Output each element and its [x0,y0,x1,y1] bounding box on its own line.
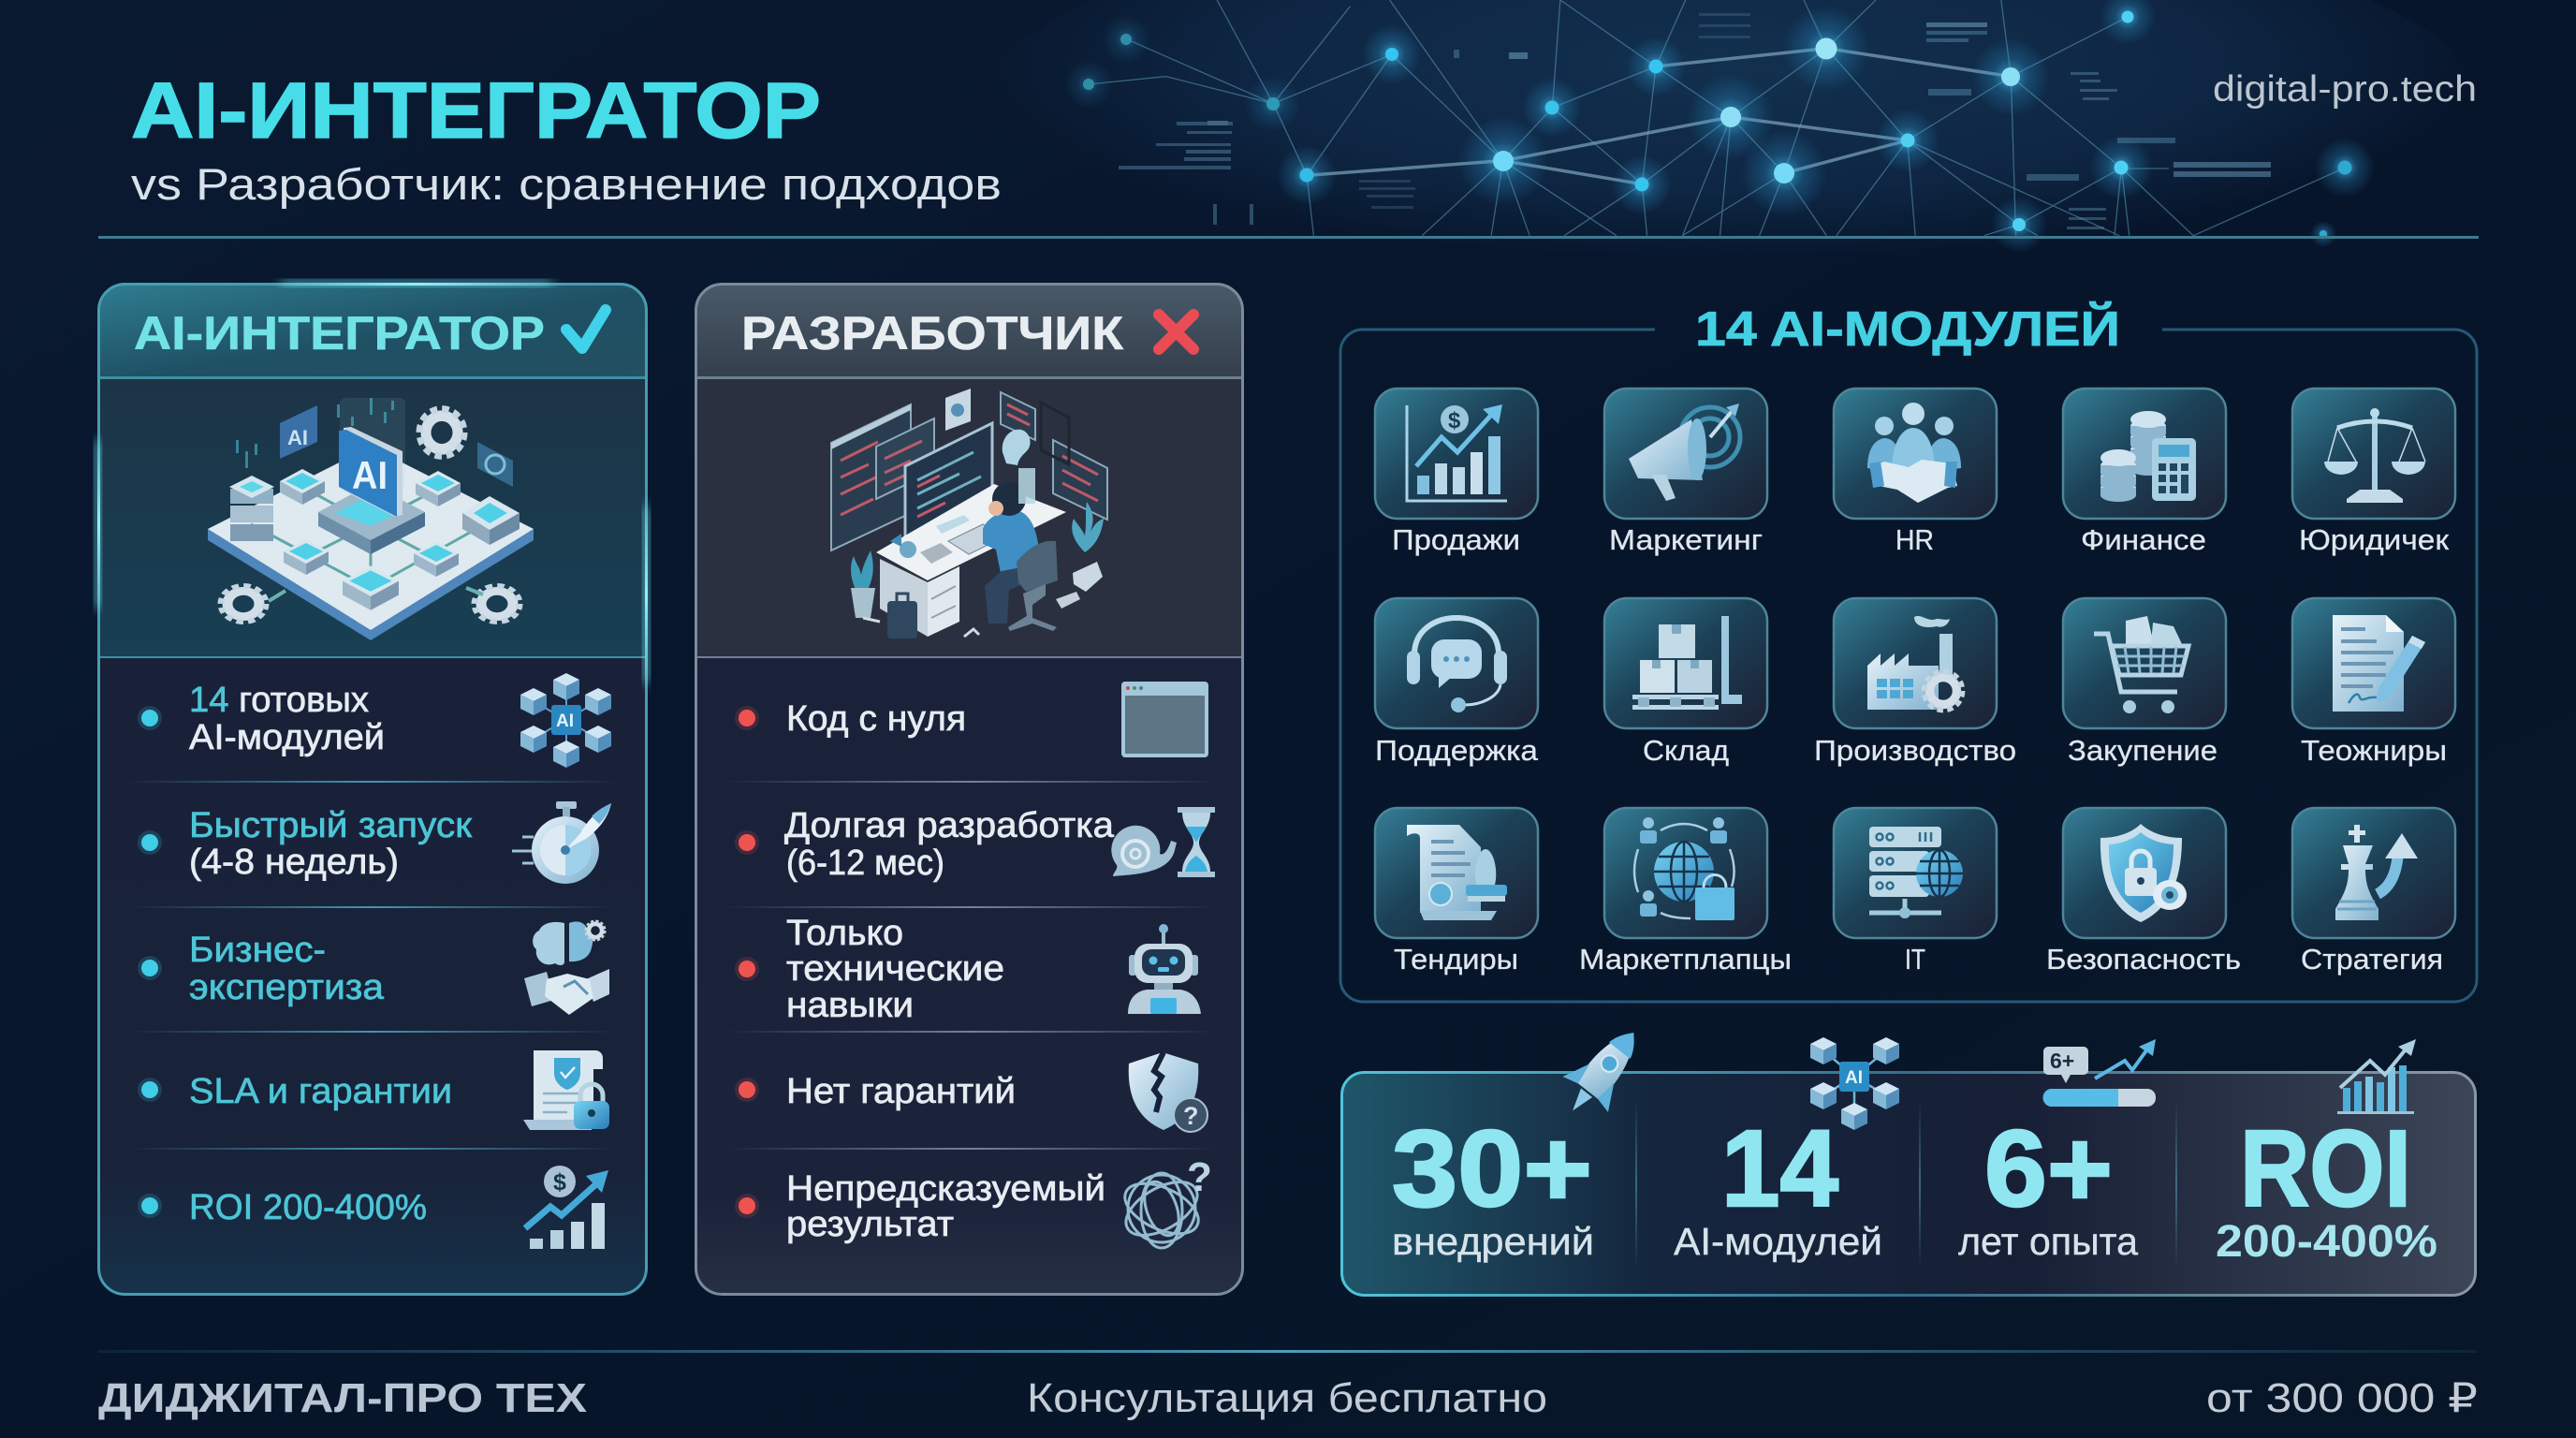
module: legal [2292,389,2455,556]
panel heading: РАЗРАБОТЧИК [741,307,1124,360]
row separators [725,781,1217,1150]
neural network graphic [1064,0,2375,253]
module: marketing [1604,389,1767,556]
network backdrop glow [983,0,2481,300]
icon: sales chart: $ [1448,408,1461,433]
module: warehouse [1604,598,1767,767]
row: code from scratch [735,682,1208,757]
row: 14 modules [138,673,611,768]
label: HR [1895,523,1934,556]
label: Маркетплапцы [1579,943,1792,976]
icon: servers and globe [1869,827,1963,918]
illustration: developer at desk [831,389,1107,638]
icon: chess king and arrow [2335,825,2418,920]
illustration: isometric AI platform: AI [287,426,308,449]
icon: shield lock eye [2100,824,2187,922]
stat: modules: AI-модулей [1674,1220,1882,1263]
footer: consultation: Консультация бесплатно [1027,1375,1547,1421]
icon: sales chart [1407,404,1507,501]
row: SLA: SLA и гарантии [189,1072,452,1111]
icon: robot [1128,924,1201,1014]
label: Финансе [2081,523,2206,556]
row: ROI: ROI 200-400% [189,1188,427,1227]
icon: document and pencil [2333,615,2425,712]
row: business expertise: Бизнес- [189,931,326,970]
module: HR [1834,389,1997,556]
label: Тендиры [1394,943,1518,976]
icon: rocket [1550,1015,1656,1128]
icon: tangle with question mark [1118,1154,1212,1248]
label: Склад [1643,734,1729,767]
stats bar [1342,1015,2475,1296]
icon: growth chart: $ [553,1169,566,1196]
icon: broken shield: ? [1183,1102,1198,1130]
icon: broken shield [1129,1052,1208,1132]
module: finance [2063,389,2226,556]
row: 14 modules: AI-модулей [189,718,385,757]
data fragments [1119,13,2271,229]
stat: modules [1674,1037,1899,1263]
icon: headset [1407,618,1507,712]
row: long development: (6-12 мес) [786,844,944,883]
row: long development [735,806,1215,883]
icon: factory [1867,616,1962,710]
stat: implementations: 30+ [1392,1108,1592,1229]
stat: implementations: внедрений [1392,1220,1594,1263]
icon: blank window [1121,682,1208,757]
row: technical skills only: навыки [786,986,914,1025]
icon: red cross [1159,315,1193,349]
stat: implementations [1392,1015,1656,1263]
panel: AI-integrator [95,281,649,1295]
row: no guarantees [735,1052,1208,1132]
module: technical writers [2292,598,2455,767]
stat: years: лет опыта [1958,1220,2138,1263]
label: Производство [1814,734,2016,767]
icon: team handshake [1867,403,1961,503]
module: IT [1834,808,1997,976]
stat dividers [1635,1100,2177,1269]
title: AI-ИНТЕГРАТОР [131,66,821,154]
icon: megaphone and target [1629,404,1740,501]
icon: scales [2324,408,2425,503]
stat: years: 6+ [1984,1108,2113,1229]
icon: coins and calculator [2100,411,2196,502]
icon: tangle with question mark: ? [1187,1154,1212,1200]
row: fast launch [138,801,611,884]
icon: globe with bag [1634,817,1734,920]
row: long development: Долгая разработка [784,806,1115,845]
row: business expertise [138,921,609,1015]
label: Закупение [2068,734,2217,767]
subtitle: vs Разработчик: сравнение подходов [131,159,1002,209]
icon: shopping cart [2094,616,2188,713]
row: unpredictable result [735,1154,1212,1248]
module: production [1814,598,2016,767]
row: unpredictable result: Непредсказуемый [786,1169,1105,1209]
icon: contract and lock [523,1050,609,1130]
icon: check mark [566,310,606,348]
label: Теожниры [2301,734,2447,767]
stat: modules: 14 [1721,1108,1838,1229]
row: technical skills only: технические [786,949,1004,989]
panel: developer [695,284,1243,1295]
icon: AI cubes: AI [556,712,574,731]
icon: stopwatch and rocket [512,801,611,884]
icon: pallet boxes [1632,616,1742,710]
stat: ROI: 200-400% [2216,1217,2437,1267]
modules heading: 14 AI-МОДУЛЕЙ [1695,301,2120,357]
row: technical skills only [735,914,1201,1025]
label: Безопасность [2046,943,2241,976]
icon: ROI chart [2337,1039,2416,1114]
illustration: isometric AI platform [208,398,534,640]
module: procurement [2063,598,2226,767]
header rule [98,236,2479,239]
module: marketplaces [1579,808,1792,976]
footer: price: от 300 000 ₽ [2206,1375,2478,1421]
row: code from scratch: Код с нуля [786,699,966,739]
icon: scroll and stamp [1407,825,1507,920]
icon: progress and trend: 6+ [2050,1049,2074,1073]
panel heading: AI-ИНТЕГРАТОР [134,307,545,360]
icon: AI chip network [1810,1037,1899,1130]
icon: AI cubes [520,673,611,768]
icon: AI chip network: AI [1845,1068,1863,1088]
label: IT [1905,943,1925,976]
module: tenders [1375,808,1538,976]
stat: ROI [2216,1039,2437,1267]
stat: ROI: ROI [2240,1108,2411,1229]
label: Маркетинг [1609,523,1763,556]
icon: progress and trend [2042,1039,2156,1107]
stat: years [1958,1039,2156,1263]
row: 14 modules: 14 готовых [189,681,369,720]
row: business expertise: экспертиза [189,968,385,1007]
label: Продажи [1392,523,1520,556]
label: Стратегия [2301,943,2443,976]
panel: 14 AI modules [1340,301,2477,1002]
icon: growth chart [525,1166,608,1249]
row: unpredictable result: результат [786,1205,954,1244]
label: Юридичек [2299,523,2449,556]
module: strategy [2292,808,2455,976]
icon: brain and handshake [524,921,609,1015]
row: no guarantees: Нет гарантий [786,1072,1016,1111]
website: digital-pro.tech [2213,69,2477,110]
row: fast launch: Быстрый запуск [189,806,472,845]
row: ROI [138,1166,608,1249]
module: support [1375,598,1539,767]
row separators [126,781,618,1150]
row: technical skills only: Только [786,914,903,953]
footer: brand: ДИДЖИТАЛ-ПРО ТЕХ [98,1375,587,1421]
illustration: isometric AI platform: AI [352,453,388,497]
row: fast launch: (4-8 недель) [189,843,399,882]
footer rule [98,1350,2477,1353]
row: SLA [138,1050,609,1130]
label: Поддержка [1375,734,1539,767]
module: security [2046,808,2241,976]
icon: snail and hourglass [1111,807,1215,877]
module: sales [1375,389,1538,556]
